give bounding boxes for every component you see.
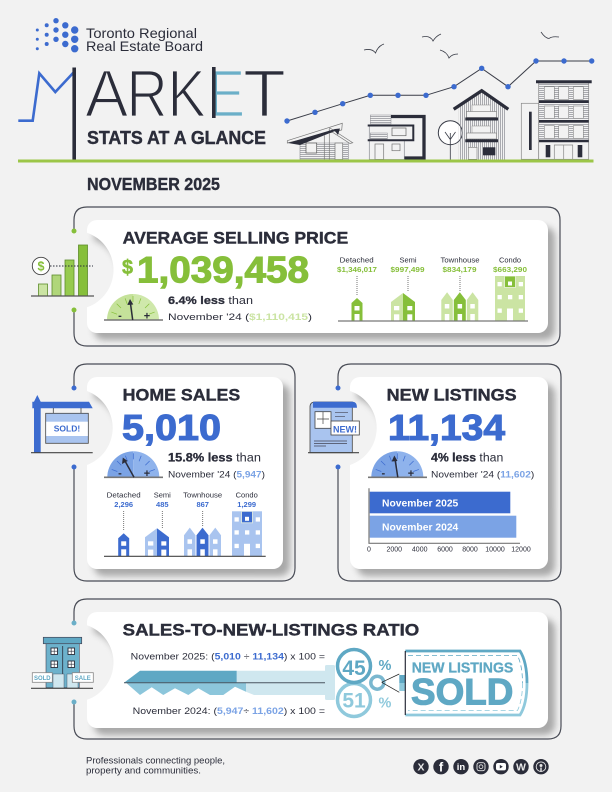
chart: sales by home type: 1,299 [237,500,256,509]
skyline: house one [287,123,353,160]
birds [364,32,559,58]
social media icons: W [516,762,526,774]
ratio rings: 45 and 51 percent [338,650,392,716]
chart: sales by home type: 867 [196,500,209,509]
panel: home sales [31,364,295,581]
title: MARKET: E [208,57,245,132]
chart: price by home type: $834,179 [442,265,476,274]
text: sales comparison: November '24 ( 5,947) [168,470,265,481]
chart: price by home type: Detached [340,256,374,265]
icon: new listing document [308,402,359,453]
chart: sales by home type: Condo [236,491,258,500]
footer tagline: Professionals connecting people, [86,756,225,767]
icon: sold sign: SOLD! [54,424,80,434]
gauge: listings change [368,451,427,480]
tag: new listings sold: SOLD [411,671,513,712]
ratio rings: 45 and 51 percent: % [379,658,392,674]
text: 2024 formula: November 2024: ( 5,947 ÷ 11,602 ) x 100 = [133,706,325,717]
heading: average selling price: AVERAGE SELLING PRICE [123,228,348,247]
skyline: tree [438,121,462,160]
tag: new listings sold: NEW LISTINGS [412,659,513,676]
panel: average selling price [31,207,560,346]
chart: price by home type: $997,499 [390,265,424,274]
text: listings comparison: 4% less than [431,453,503,465]
ratio rings: 45 and 51 percent: 51 [342,690,366,712]
text: listings comparison [431,453,534,481]
gauge: price change: - [118,310,122,322]
icon: dollar bar chart: $ [38,260,45,274]
icon: apartment with sold and sale signs: SALE [75,676,91,682]
chart: sales by home type: 485 [156,500,169,509]
icon: apartment with sold and sale signs: SOLD [34,676,51,682]
skyline: house three [454,91,508,160]
bar chart: listings [367,488,531,554]
chart: sales by home type [104,491,266,556]
chart: sales by home type: Semi [154,491,171,500]
gauge: sales change: - [118,468,122,480]
gauge: price change: + [144,310,150,322]
date heading: NOVEMBER 2025 [87,174,220,194]
gauge: sales change: + [144,468,150,480]
bar chart: listings: 2000 [387,547,402,554]
footer tagline: property and communities. [86,766,201,777]
bar chart: listings: 4000 [412,547,428,554]
text: 2025 formula: November 2025: ( 5,010 ÷ 11,134 ) x 100 = [131,651,325,662]
icon: new listing document: NEW! [333,424,357,434]
chart: price by home type [337,256,528,321]
logo: Toronto Regional Real Estate Board: Real Estate Board [86,38,203,54]
text: listings comparison: November '24 ( 11,602) [431,470,534,481]
chart: sales by home type: 2,296 [114,500,133,509]
heading: ratio: SALES-TO-NEW-LISTINGS RATIO [123,621,419,640]
chart: price by home type: $1,346,017 [337,265,377,274]
skyline: house two [368,115,424,160]
bar chart: listings: 0 [367,547,371,554]
bar chart: listings: 6000 [437,547,453,554]
ratio rings: 45 and 51 percent: 45 [342,657,366,680]
title: MARKET: T [243,56,286,131]
text: price comparison: 6.4% less than [168,295,253,307]
chart: price by home type: $663,290 [493,265,527,274]
panel: new listings [308,364,561,581]
title: MARKET: A [85,56,128,131]
bar chart: listings: November 2025 [382,499,459,510]
icon: apartment with sold and sale signs [31,637,93,688]
logo: Toronto Regional Real Estate Board [36,18,203,54]
footer tagline [86,756,225,777]
text: price comparison: November '24 ( $1,110,415 ) [168,312,312,323]
chart: price by home type: Semi [399,256,417,265]
heading: home sales: HOME SALES [123,386,240,405]
social media icons: X [417,762,425,774]
key bar [124,665,335,700]
text: sales comparison: 15.8% less than [168,453,261,465]
stat: home sales: 5,010 [122,407,221,448]
tag: new listings sold [382,651,527,715]
gauge: sales change [104,451,163,480]
social media icons [413,759,549,774]
subtitle: stats at a glance: STATS AT A GLANCE [87,127,266,148]
ratio rings: 45 and 51 percent: % [379,696,392,712]
social media icons: in [457,762,465,773]
title: MARKET [18,56,286,162]
chart: price by home type: Condo [499,256,521,265]
stat: new listings: 11,134 [388,407,505,448]
title: MARKET: R [126,57,168,132]
icon: dollar bar chart [31,245,94,296]
heading: new listings: NEW LISTINGS [387,386,517,405]
gauge: listings change: - [381,468,385,480]
chart: sales by home type: Detached [107,491,141,500]
bar chart: listings: 12000 [511,547,531,554]
text: sales comparison [168,453,265,481]
bar chart: listings: 10000 [485,547,505,554]
rising line chart [284,58,594,124]
text: price comparison [168,295,312,323]
bar chart: listings: 8000 [462,547,478,554]
social media icons: f [439,760,444,774]
ground line [18,160,594,162]
gauge: listings change: + [408,468,414,480]
stat: average price: 1,039,458 [137,249,309,290]
panel: sales-to-new-listings ratio [31,599,561,739]
skyline: apartment building [521,82,592,159]
gauge: price change [104,294,163,322]
logo: Toronto Regional Real Estate Board: Toronto Regional [86,25,197,41]
title: MARKET: K [168,57,206,132]
stat: average price: $ [122,257,133,279]
icon: sold sign [31,395,93,453]
chart: sales by home type: Townhouse [183,491,222,500]
bar chart: listings: November 2024 [382,523,459,534]
chart: price by home type: Townhouse [440,256,480,265]
